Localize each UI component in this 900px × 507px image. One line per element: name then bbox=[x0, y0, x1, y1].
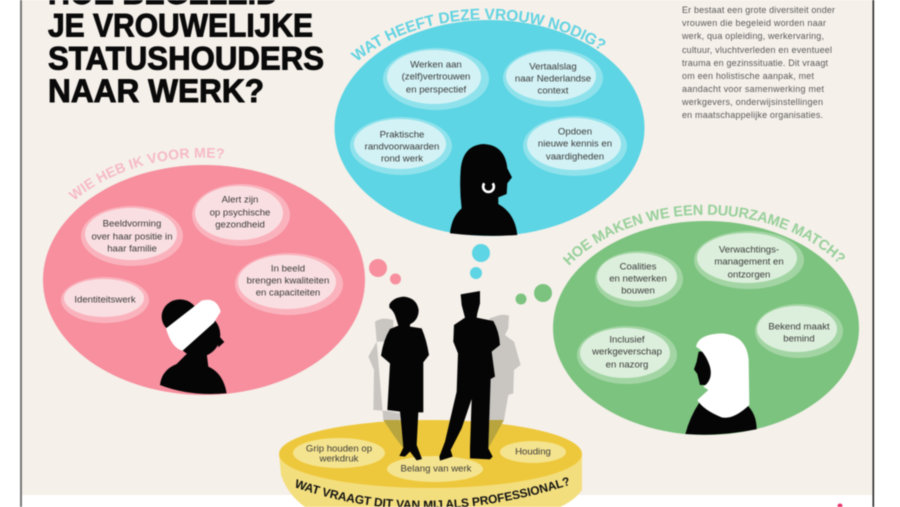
intro text block: trauma en gezinssituatie. Dit vraagt bbox=[682, 58, 828, 68]
bubble: inclusief werkgeverschap bbox=[577, 326, 677, 384]
bubble: coalities: Coalities bbox=[620, 262, 657, 273]
bubble: grip houden: werkdruk bbox=[319, 454, 359, 465]
icon: shadows of professionals bbox=[368, 315, 521, 448]
heading: green: HOE MAKEN WE EEN DUURZAME MATCH? bbox=[562, 204, 846, 266]
bubble: randvoorwaarden: randvoorwaarden bbox=[365, 142, 439, 153]
intro text block: werkgevers, onderwijsinstellingen bbox=[681, 97, 823, 107]
bubble: houding: Houding bbox=[515, 447, 551, 458]
intro text block: vrouwen die begeleid worden naar bbox=[682, 18, 826, 28]
bubble: identiteitswerk bbox=[61, 277, 149, 323]
bubble: psychische gezondheid: op psychische bbox=[210, 208, 270, 219]
bubble: verwachtingsmanagement: management en bbox=[714, 257, 784, 268]
intro text block: aandacht voor samenwerking met bbox=[682, 84, 824, 94]
bubble: kwaliteiten: brengen kwaliteiten bbox=[247, 276, 329, 287]
bubble: identiteitswerk: Identiteitswerk bbox=[74, 295, 136, 306]
bubble: vertaalslag: naar Nederlandse bbox=[515, 74, 591, 85]
bubble: kennis: Opdoen bbox=[558, 127, 592, 138]
title: STATUSHOUDERS bbox=[48, 40, 324, 76]
bubble: inclusief werkgeverschap: werkgeverschap bbox=[591, 347, 662, 358]
panel: green thought bubble bbox=[552, 204, 860, 436]
bubble: beeldvorming: haar familie bbox=[107, 244, 157, 255]
intro text block: en maatschappelijke organisaties. bbox=[682, 110, 823, 120]
bubble: vertaalslag: context bbox=[538, 86, 569, 97]
bubble: bekend maakt bemind bbox=[755, 304, 843, 358]
intro text block bbox=[681, 5, 835, 120]
icon: male professional silhouette bbox=[439, 291, 500, 461]
bubble: grip houden bbox=[293, 438, 385, 468]
icon: blue thought dots bbox=[470, 244, 490, 279]
intro text block: Er bestaat een grote diversiteit onder bbox=[682, 5, 835, 15]
bubble: kwaliteiten bbox=[235, 253, 343, 315]
bubble: vertaalslag bbox=[503, 49, 603, 107]
panel: blue thought bubble bbox=[334, 8, 646, 237]
icon: female professional silhouette bbox=[381, 297, 429, 460]
icon: woman with headband bbox=[160, 299, 227, 394]
footer logo mark bbox=[838, 504, 842, 507]
bubble: grip houden: Grip houden op bbox=[306, 444, 372, 455]
bubble: kennis bbox=[523, 116, 627, 176]
bubble: randvoorwaarden: rond werk bbox=[381, 154, 423, 165]
bubble: randvoorwaarden bbox=[350, 117, 452, 175]
title bbox=[48, 0, 324, 109]
bubble: belang van werk bbox=[387, 456, 483, 482]
bubble: zelfvertrouwen: Werken aan bbox=[410, 60, 462, 71]
bubble: kennis: vaardigheden bbox=[546, 152, 604, 163]
bubble: kwaliteiten: en capaciteiten bbox=[256, 288, 320, 299]
title: NAAR WERK? bbox=[48, 73, 264, 109]
bubble: beeldvorming: over haar positie in bbox=[91, 232, 173, 243]
bubble: beeldvorming bbox=[81, 206, 183, 266]
bubble: belang van werk: Belang van werk bbox=[401, 464, 472, 475]
bubble: kennis: nieuwe kennis en bbox=[538, 139, 612, 150]
bubble: zelfvertrouwen: en perspectief bbox=[406, 85, 466, 96]
bubble: verwachtingsmanagement bbox=[694, 231, 804, 289]
icon: woman with earring bbox=[450, 144, 517, 236]
bubble: bekend maakt bemind: Bekend maakt bbox=[768, 322, 830, 333]
intro text block: om een holistische aanpak, met bbox=[682, 71, 814, 81]
bubble: beeldvorming: Beeldvorming bbox=[103, 219, 161, 230]
panel: pink thought bubble bbox=[42, 147, 366, 396]
icon: green thought dots bbox=[516, 284, 552, 304]
bubble: zelfvertrouwen bbox=[383, 48, 489, 110]
heading: pink: WIE HEB IK VOOR ME? bbox=[68, 147, 224, 200]
bubble: inclusief werkgeverschap: Inclusief bbox=[609, 335, 645, 346]
intro text block: werk, qua opleiding, werkervaring, bbox=[681, 31, 824, 41]
bubble: verwachtingsmanagement: Verwachtings- bbox=[719, 245, 779, 256]
intro text block: cultuur, vluchtverleden en eventueel bbox=[682, 45, 832, 55]
bubble: coalities bbox=[595, 251, 683, 307]
bubble: inclusief werkgeverschap: en nazorg bbox=[606, 360, 648, 371]
bubble: coalities: bouwen bbox=[621, 286, 655, 297]
icon: pink thought dots bbox=[369, 259, 401, 284]
icon: woman with headscarf bbox=[685, 333, 757, 435]
bubble: zelfvertrouwen: (zelf)vertrouwen bbox=[402, 72, 470, 83]
heading: blue: WAT HEEFT DEZE VROUW NODIG? bbox=[350, 8, 606, 61]
bubble: verwachtingsmanagement: ontzorgen bbox=[728, 270, 770, 281]
bubble: psychische gezondheid: gezondheid bbox=[215, 220, 265, 231]
panel: yellow platform bbox=[278, 419, 583, 507]
bubble: psychische gezondheid: Alert zijn bbox=[222, 195, 258, 206]
bubble: randvoorwaarden: Praktische bbox=[380, 130, 424, 141]
bubble: kwaliteiten: In beeld bbox=[271, 264, 305, 275]
title: JE VROUWELIJKE bbox=[48, 8, 313, 44]
bubble: psychische gezondheid bbox=[192, 184, 290, 246]
bubble: houding bbox=[500, 441, 566, 463]
bubble: coalities: en netwerken bbox=[609, 274, 667, 285]
bubble: vertaalslag: Vertaalslag bbox=[529, 62, 577, 73]
bubble: bekend maakt bemind: bemind bbox=[783, 334, 815, 345]
